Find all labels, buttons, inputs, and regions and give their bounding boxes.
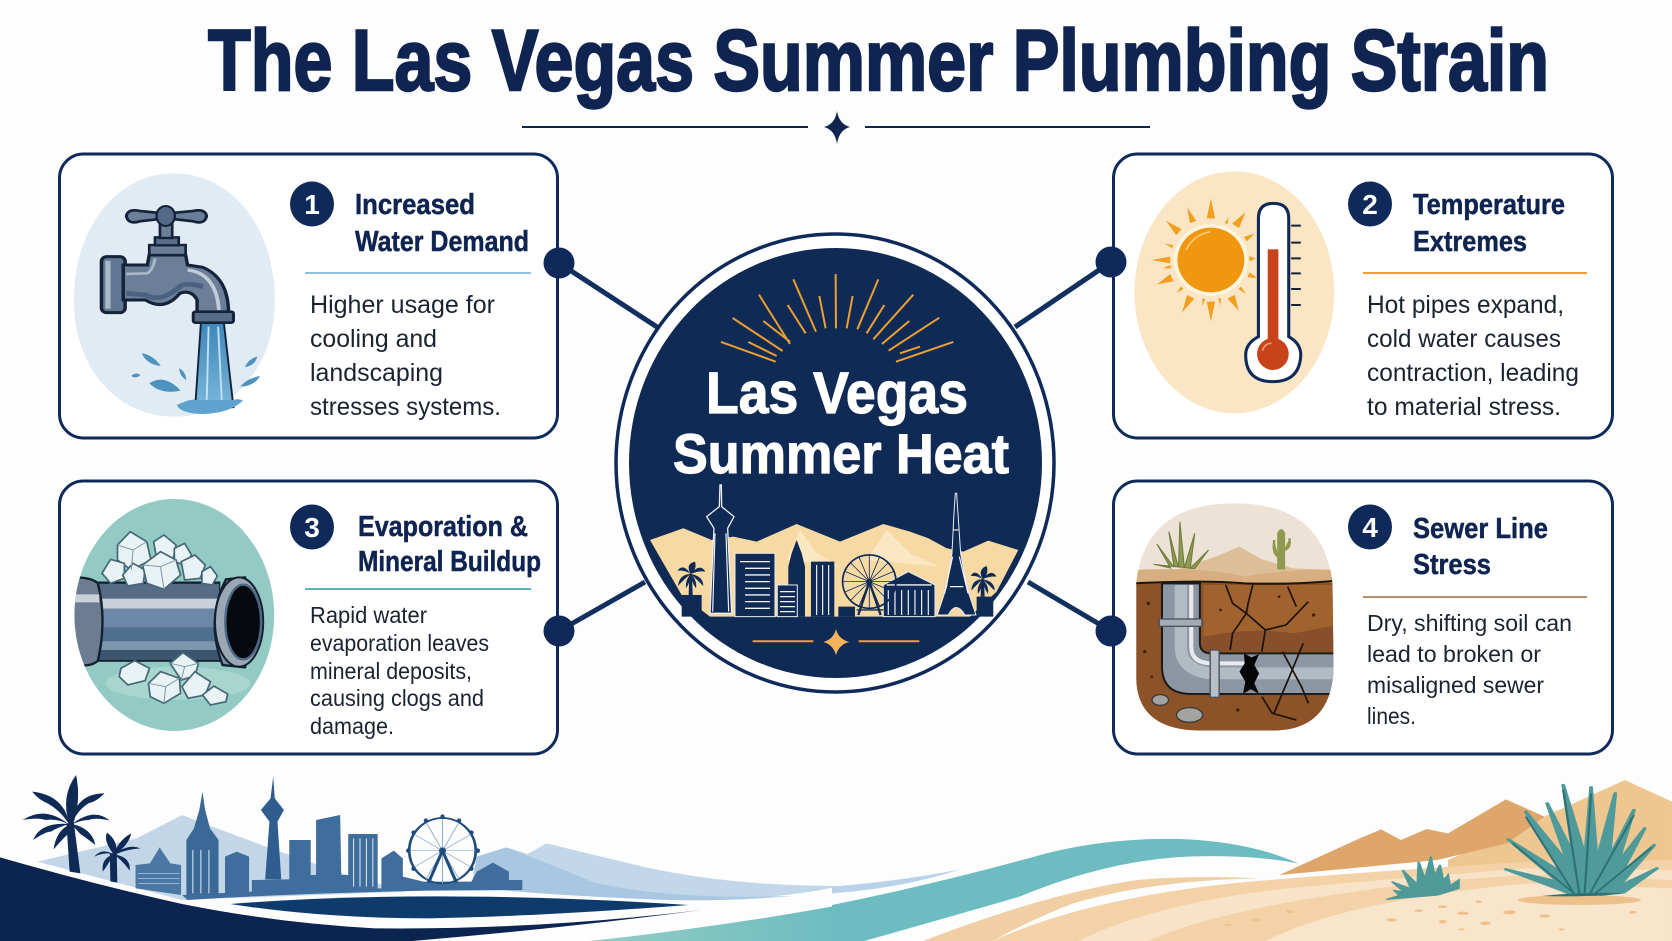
small agave: [1386, 857, 1459, 899]
number badge 1: 1: [304, 189, 320, 220]
connector lines: [559, 262, 1111, 631]
heading: Temperature: [1413, 189, 1565, 221]
ferris wheel: [406, 814, 480, 883]
panel: sewer line stress: [1114, 481, 1612, 754]
palm trees: [22, 775, 140, 883]
number badge 3: [290, 504, 334, 550]
heading: Stress: [1413, 549, 1491, 581]
body text: stresses systems.: [310, 393, 501, 421]
number badge 2: 2: [1362, 189, 1378, 220]
body text: to material stress.: [1367, 393, 1561, 421]
body text: cooling and: [310, 325, 437, 353]
body text: Hot pipes expand,: [1367, 291, 1564, 319]
body text: [310, 602, 489, 739]
body text: lead to broken or: [1367, 641, 1541, 667]
body text: lines.: [1367, 703, 1416, 729]
body text: Higher usage for: [310, 291, 495, 319]
icon: cracked sewer pipe in soil: [1134, 502, 1338, 733]
number badge 3: 3: [304, 512, 320, 543]
body text: contraction, leading: [1367, 359, 1579, 387]
body text: causing clogs and: [310, 685, 484, 711]
panel: temperature extremes: [1114, 154, 1612, 438]
body text: cold water causes: [1367, 325, 1561, 353]
number badge 4: 4: [1362, 512, 1378, 543]
heading: [358, 511, 541, 578]
number badge 4: [1348, 504, 1392, 550]
heading: [1413, 189, 1565, 258]
icon: sun and thermometer: [1134, 171, 1334, 413]
teal wave: [832, 839, 1298, 941]
large agave: [1506, 785, 1657, 896]
icon: pipe with mineral crystals: [73, 499, 274, 731]
badge ornament: [753, 629, 919, 655]
number badge 2: [1348, 182, 1392, 226]
panel: increased water demand: [60, 154, 558, 438]
heading in badge: Las Vegas: [706, 361, 968, 426]
number badge 1: [290, 182, 334, 226]
footer: city and water waves: [0, 775, 840, 941]
body text: misaligned sewer: [1367, 672, 1544, 698]
body text: damage.: [310, 713, 394, 739]
mountains: [1279, 780, 1672, 893]
heading in badge: [673, 361, 1009, 485]
body text: landscaping: [310, 359, 443, 387]
pebbles: [1225, 900, 1637, 930]
title divider with star: [522, 111, 1150, 144]
central badge: Las Vegas Summer Heat: [616, 234, 1054, 692]
heading: [355, 189, 529, 258]
body text: [310, 291, 501, 421]
heading: Sewer Line: [1413, 513, 1548, 545]
panel: evaporation and mineral buildup: [60, 481, 558, 754]
heading: Evaporation &: [358, 511, 528, 543]
footer: desert landscape: [832, 780, 1672, 941]
heading: Increased: [355, 189, 475, 221]
heading: [1413, 513, 1548, 581]
body text: [1367, 291, 1579, 421]
navy wave: [0, 857, 702, 941]
icon: dripping faucet: [74, 173, 275, 417]
skyline in badge: [650, 485, 1018, 617]
body text: evaporation leaves: [310, 630, 489, 656]
heading: Extremes: [1413, 226, 1527, 258]
heading: Water Demand: [355, 226, 529, 258]
body text: [1367, 610, 1572, 729]
body text: Rapid water: [310, 602, 427, 628]
sun rays: [721, 274, 953, 362]
body text: Dry, shifting soil can: [1367, 610, 1572, 636]
skyline silhouette: [136, 777, 522, 900]
heading: Mineral Buildup: [358, 546, 541, 578]
sand dunes: [923, 860, 1672, 941]
connector dots: [544, 246, 1126, 646]
heading in badge: Summer Heat: [673, 422, 1009, 485]
body text: mineral deposits,: [310, 658, 472, 684]
pale blue mountains: [37, 815, 840, 900]
